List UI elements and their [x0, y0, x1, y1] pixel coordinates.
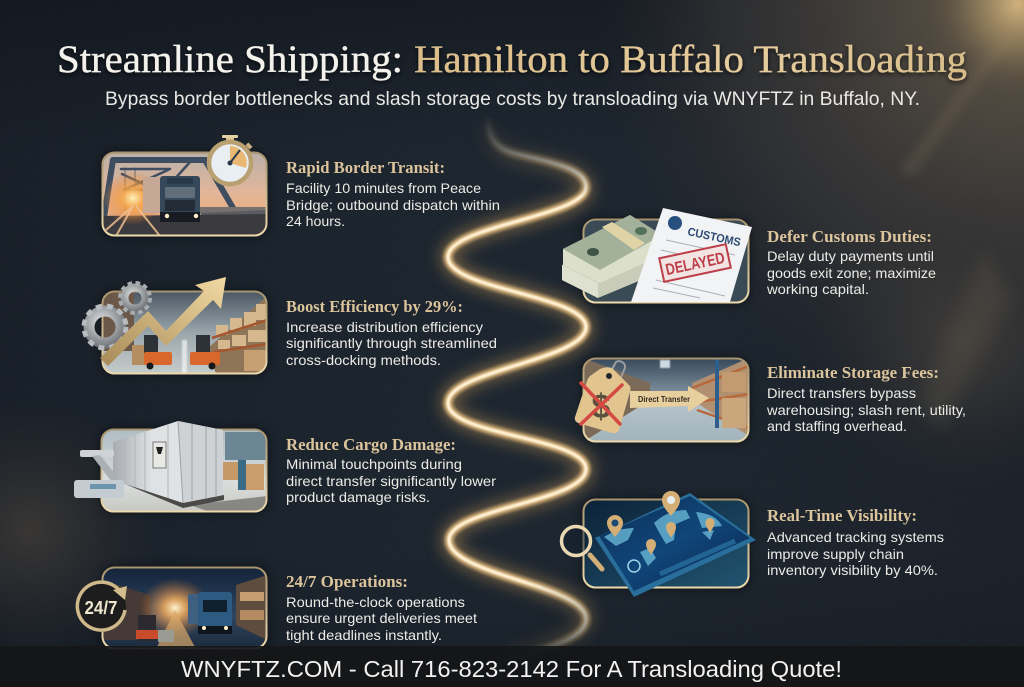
body text	[286, 456, 496, 505]
footer call-to-action bar: WNYFTZ.COM - Call 716-823-2142 For A Transloading Quote!	[181, 656, 842, 682]
icon: 24/7 clock badge: 24/7	[84, 598, 118, 618]
icon: robot lift	[74, 450, 124, 498]
body text: Bridge; outbound dispatch within	[286, 197, 500, 213]
icon: shipping container	[113, 421, 224, 508]
icon: stopwatch	[209, 135, 253, 184]
icon: stacks of dollar bills	[562, 215, 662, 298]
body text	[286, 594, 477, 643]
icon: rising gold arrow	[100, 277, 226, 366]
icon: price tag crossed out: $	[592, 388, 611, 426]
image: warehouse floor and boxes	[101, 429, 267, 512]
panel: reduce cargo damage	[74, 421, 496, 512]
body text: Minimal touchpoints during	[286, 456, 462, 472]
icon: location pins	[607, 491, 714, 555]
image: slate backing card	[583, 219, 749, 303]
icon: tablet with world map	[595, 493, 756, 597]
title: Streamline Shipping:	[57, 38, 403, 81]
glowing gold wave connector	[448, 118, 586, 660]
icon: customs document with delayed stamp: CUSTOMS	[686, 226, 742, 249]
panel: defer customs duties	[562, 208, 936, 303]
icon: direct transfer arrow sign	[630, 386, 709, 412]
body text: cross-docking methods.	[286, 352, 441, 368]
heading: Defer Customs Duties:	[767, 227, 932, 246]
title	[57, 38, 967, 81]
footer call-to-action bar	[0, 646, 1024, 687]
panel: eliminate storage fees	[575, 358, 966, 442]
image: truck on bridge at sunset	[102, 152, 267, 236]
icon: customs document with delayed stamp	[631, 208, 752, 302]
panel: real-time visibility	[562, 491, 944, 597]
icon: price tag crossed out	[575, 361, 630, 433]
body text: inventory visibility by 40%.	[767, 562, 938, 578]
subtitle: Bypass border bottlenecks and slash storage costs by transloading via WNYFTZ in Buffalo, NY.	[105, 88, 920, 110]
heading: Real-Time Visibility:	[767, 506, 917, 525]
body text: product damage risks.	[286, 489, 430, 505]
heading: Eliminate Storage Fees:	[767, 363, 939, 382]
panel: 24/7 operations	[76, 567, 477, 649]
icon: direct transfer arrow sign: Direct Transfer	[638, 394, 691, 404]
image: warehouse aisle	[583, 358, 749, 442]
body text: Direct transfers bypass	[767, 385, 916, 401]
body text: goods exit zone; maximize	[767, 265, 936, 281]
panel: boost efficiency	[84, 277, 497, 374]
body text: significantly through streamlined	[286, 335, 497, 351]
icon: magnifying glass	[562, 526, 602, 569]
body text: Facility 10 minutes from Peace	[286, 180, 481, 196]
body text: 24 hours.	[286, 213, 345, 229]
icon: customs document with delayed stamp: DELAYED	[664, 250, 726, 279]
body text: warehousing; slash rent, utility,	[766, 402, 966, 418]
body text: direct transfer significantly lower	[286, 473, 496, 489]
image: blue backing card	[583, 499, 749, 588]
body text: improve supply chain	[767, 546, 904, 562]
body text: and staffing overhead.	[767, 418, 907, 434]
body text: Round-the-clock operations	[286, 594, 465, 610]
heading: Rapid Border Transit:	[286, 158, 445, 177]
body text: Advanced tracking systems	[767, 529, 944, 545]
body text	[766, 248, 936, 297]
body text: Delay duty payments until	[767, 248, 934, 264]
body text: Increase distribution efficiency	[286, 319, 483, 335]
icon: small gear	[120, 283, 150, 313]
icon: 24/7 clock badge	[76, 582, 127, 632]
body text: tight deadlines instantly.	[286, 627, 442, 643]
image: warehouse with forklifts	[102, 291, 267, 374]
body text: ensure urgent deliveries meet	[286, 610, 477, 626]
heading: 24/7 Operations:	[286, 572, 408, 591]
icon: large gear	[84, 306, 126, 348]
body text	[766, 385, 966, 434]
title: Hamilton to Buffalo Transloading	[414, 38, 967, 81]
body text	[286, 180, 500, 229]
body text	[286, 319, 497, 368]
heading: Boost Efficiency by 29%:	[286, 297, 463, 316]
panel: rapid border transit	[102, 135, 500, 236]
body text: working capital.	[766, 281, 869, 297]
body text	[767, 529, 944, 578]
heading: Reduce Cargo Damage:	[286, 435, 456, 454]
image: night warehouse with truck	[102, 567, 267, 649]
